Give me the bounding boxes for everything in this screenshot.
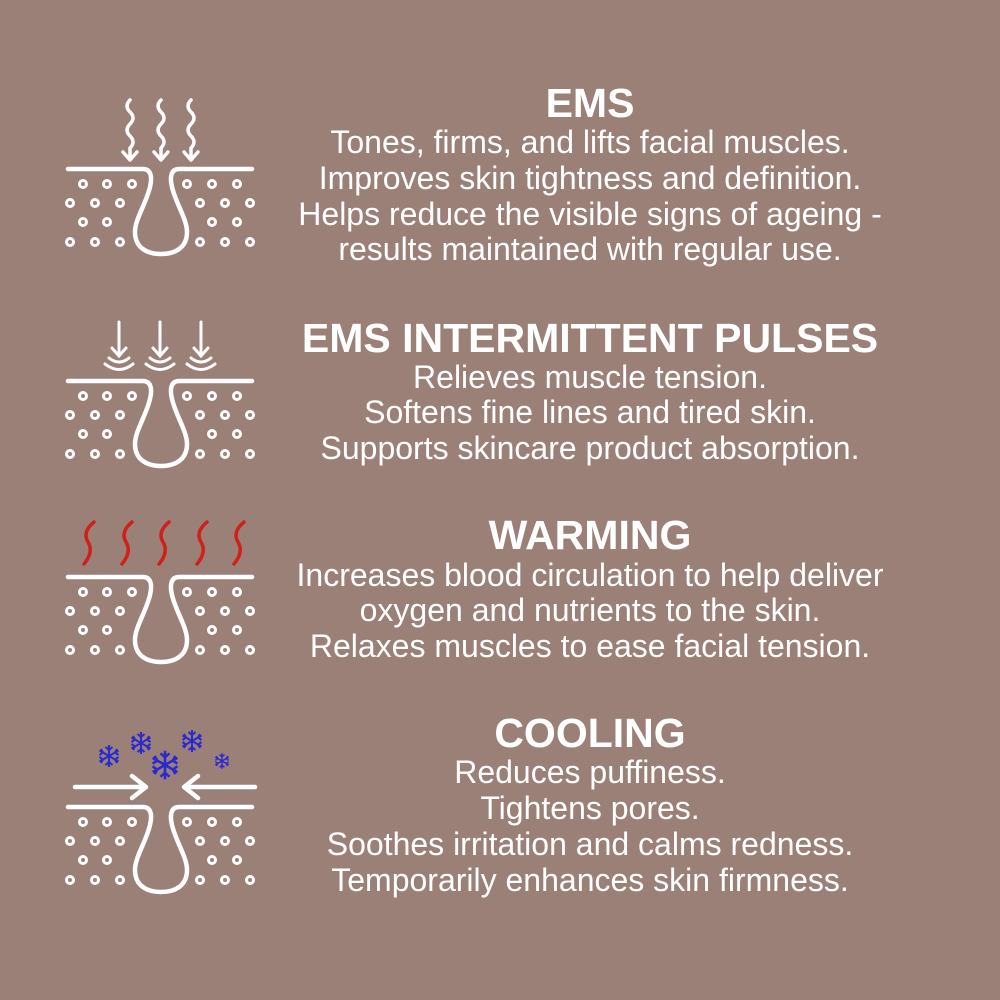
text block: cooling: Tightens pores.: [480, 790, 700, 826]
icon: warming: [66, 522, 254, 662]
text block: cooling: Soothes irritation and calms redness.: [327, 826, 853, 862]
text block: EMS: Helps reduce the visible signs of ageing -: [298, 196, 882, 232]
text block: EMS intermittent pulses: Supports skincare product absorption.: [321, 430, 859, 466]
text block: warming: Increases blood circulation to help deliver: [296, 557, 884, 593]
text block: cooling: Temporarily enhances skin firmness.: [331, 862, 849, 898]
heading: warming: WARMING: [489, 512, 691, 558]
text block: warming: oxygen and nutrients to the skin.: [360, 592, 820, 628]
text block: cooling: [327, 710, 853, 898]
text block: EMS: [298, 80, 882, 267]
heading: EMS: EMS: [546, 80, 634, 126]
text block: EMS: Tones, firms, and lifts facial muscles.: [330, 124, 850, 160]
icon: cooling: [66, 730, 255, 892]
icon: EMS: [66, 100, 254, 254]
text block: EMS intermittent pulses: [302, 315, 878, 466]
heading: cooling: COOLING: [494, 710, 686, 756]
text block: EMS intermittent pulses: Relieves muscle tension.: [413, 359, 767, 395]
icon: EMS intermittent pulses: [66, 322, 254, 466]
text block: cooling: Reduces puffiness.: [454, 754, 726, 790]
heading: EMS intermittent pulses: EMS INTERMITTENT PULSES: [302, 315, 878, 361]
text block: EMS: Improves skin tightness and definition.: [319, 160, 861, 196]
text block: EMS intermittent pulses: Softens fine lines and tired skin.: [364, 394, 816, 430]
text block: warming: Relaxes muscles to ease facial tension.: [310, 628, 870, 664]
text block: warming: [296, 512, 884, 664]
text block: EMS: results maintained with regular use.: [338, 231, 842, 267]
